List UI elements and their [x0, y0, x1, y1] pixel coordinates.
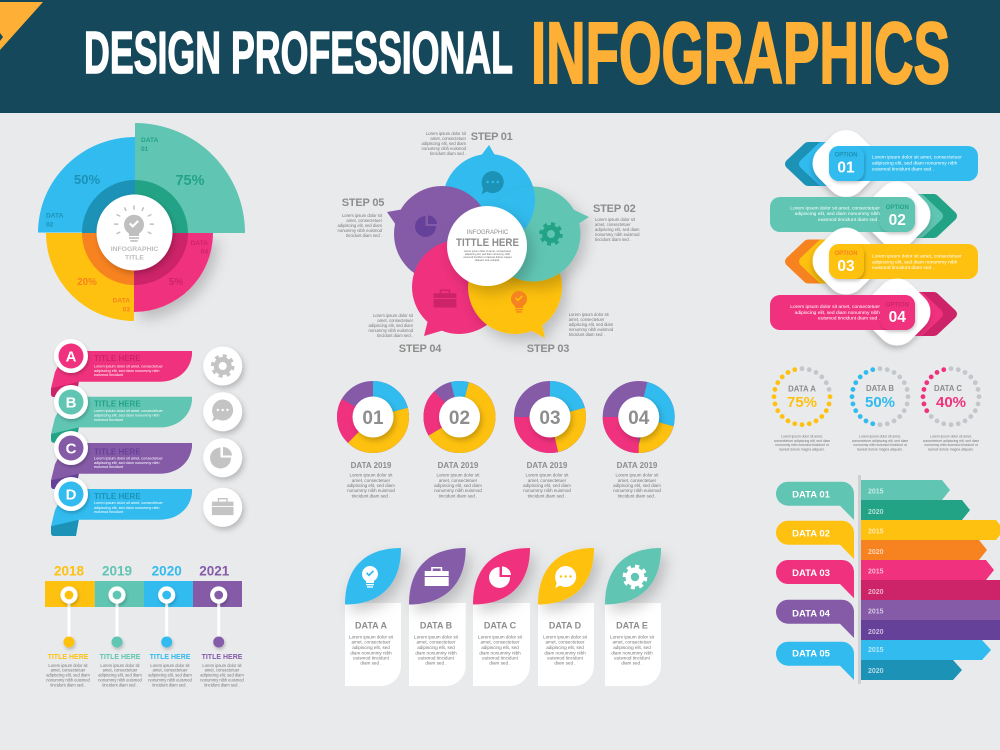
chart labels: 50% — [74, 172, 100, 187]
gauge B: consectetuer adipiscing elit, sed diam — [852, 439, 908, 443]
card E — [605, 548, 661, 686]
data label 04: DATA 04 — [792, 609, 831, 620]
gauge C: nonummy nibh euismod tincidunt ut — [924, 443, 978, 447]
card A: diam sed . — [360, 661, 382, 666]
chart labels: 75% — [175, 173, 205, 189]
card B: adipiscing elit, sed — [417, 645, 455, 650]
gauge C — [923, 369, 979, 452]
chart labels: DATA — [191, 240, 208, 247]
timeline 2021: TITLE HERE — [202, 654, 243, 661]
step labels: STEP 01 — [471, 131, 513, 143]
timeline 2019: TITLE HERE — [100, 654, 141, 661]
chart labels: 02 — [46, 222, 54, 228]
step descriptions: adipiscing elit, sed diam — [369, 323, 414, 328]
card A: Lorem ipsum dolor sit — [349, 634, 393, 639]
gauge A: nonummy nibh euismod tincidunt ut — [775, 443, 829, 447]
center circle — [447, 206, 527, 286]
ribbon B — [51, 385, 192, 443]
gauge C: laoreet dolore magna aliquam. — [928, 448, 974, 452]
option 01: OPTION — [834, 153, 858, 159]
card C: adipiscing elit, sed — [481, 645, 519, 650]
bar year labels: 2020 — [868, 589, 884, 596]
timeline 2020: amet, consectetuer — [153, 668, 188, 672]
icon: chat badge — [203, 392, 242, 431]
polar quadrant chart — [38, 123, 245, 321]
chart labels: 01 — [141, 146, 149, 153]
gauge A: Lorem ipsum dolor sit amet, — [781, 434, 823, 438]
option 04: OPTION — [886, 303, 909, 309]
timeline 2020: tincidunt diam sed . — [152, 682, 188, 687]
donut 04: DATA 2019 — [617, 461, 658, 470]
donut 03: Lorem ipsum dolor sit — [525, 472, 569, 478]
option 02: euismod tincidunt diam sed . — [818, 217, 880, 223]
timeline 2019 — [98, 564, 142, 687]
gauge B: Lorem ipsum dolor sit amet, — [859, 434, 901, 438]
card A — [345, 548, 401, 686]
donut 02: nonummy nibh euismod — [434, 488, 482, 493]
step descriptions: tincidunt diam sed . — [377, 333, 413, 338]
option 03: adipiscing elit, sed diam nonummy nibh — [872, 259, 958, 265]
circle: step 04 — [412, 240, 506, 336]
ribbon C: C — [66, 440, 77, 458]
gauge A: laoreet dolore magna aliquam. — [779, 448, 825, 452]
corner ribbon — [0, 2, 43, 50]
donut 02 — [432, 389, 488, 498]
timeline 2019: tincidunt diam sed . — [102, 682, 138, 687]
card D: diam sed . — [554, 661, 576, 666]
card A: euismod tincidunt — [353, 656, 390, 661]
timeline 2021 — [199, 564, 244, 687]
option 03: euismod tincidunt diam sed . — [872, 265, 934, 271]
donut 01 — [345, 389, 401, 498]
center circle: adipiscing elit, sed diam nonummy nibh — [465, 252, 511, 256]
option 01: 01 — [837, 160, 855, 176]
timeline — [45, 564, 244, 687]
donut 02: Lorem ipsum dolor sit — [436, 472, 480, 478]
timeline 2020 — [148, 564, 192, 687]
ribbon C: TITLE HERE — [94, 447, 141, 456]
ribbon B: TITLE HERE — [94, 399, 141, 408]
card C: DATA C — [484, 621, 517, 631]
ribbon D: TITLE HERE — [94, 492, 141, 501]
option 01: euismod tincidunt diam sed . — [872, 166, 934, 172]
ribbon B: euismod tincidunt — [94, 418, 124, 422]
timeline 2020: adipiscing elit, sed diam — [148, 672, 192, 678]
step descriptions: nonummy nibh euismod — [422, 146, 467, 151]
timeline 2020: TITLE HERE — [150, 654, 191, 661]
step descriptions: Lorem ipsum dolor sit — [595, 217, 635, 222]
step descriptions: adipiscing elit, sed diam — [422, 141, 467, 146]
card C: amet, consectetuer — [480, 640, 520, 645]
ribbon D: D — [66, 486, 77, 504]
data label 02 — [776, 521, 854, 559]
chart labels: 03 — [123, 306, 130, 314]
step descriptions: adipiscing elit, sed diam — [569, 322, 614, 327]
ribbon C: adipiscing elit, sed diam nonummy nibh — [94, 461, 159, 465]
donut 01: amet, consectetuer — [352, 478, 391, 483]
chart labels: 5% — [169, 277, 183, 288]
card B: amet, consectetuer — [416, 640, 456, 645]
option 02: adipiscing elit, sed diam nonummy nibh — [795, 211, 880, 217]
step descriptions: Lorem ipsum dolor sit — [569, 312, 609, 317]
card D: adipiscing elit, sed — [546, 645, 584, 650]
gauge C: DATA C — [934, 384, 962, 393]
icon: gear badge — [203, 346, 242, 386]
chart labels: 20% — [77, 277, 97, 288]
timeline 2019: amet, consectetuer — [103, 668, 138, 672]
option 04: Lorem ipsum dolor sit amet, consectetuer — [790, 305, 880, 310]
gauge C: consectetuer adipiscing elit, sed diam — [923, 439, 979, 443]
card C: euismod tincidunt — [482, 656, 519, 661]
gauge A — [774, 369, 830, 452]
icon: pie — [415, 215, 437, 237]
option 04: adipiscing elit, sed diam nonummy nibh — [795, 310, 880, 316]
donut 02: amet, consectetuer — [439, 478, 478, 483]
option 01 — [790, 122, 978, 205]
donut 03: nonummy nibh euismod — [523, 488, 571, 493]
step labels: STEP 02 — [593, 203, 636, 215]
gauge B: nonummy nibh euismod tincidunt ut — [853, 443, 907, 447]
step labels: STEP 04 — [399, 343, 442, 355]
timeline 2021: nonummy nibh euismod — [200, 678, 244, 682]
icon: bulb — [511, 291, 527, 313]
ribbon B: adipiscing elit, sed diam nonummy nibh — [94, 414, 159, 418]
option 04 — [770, 270, 952, 354]
timeline 2018: amet, consectetuer — [51, 668, 86, 672]
circle: step 03 — [468, 240, 562, 338]
option 02 — [770, 173, 952, 257]
gauge A: consectetuer adipiscing elit, sed diam — [774, 439, 830, 443]
option 03: Lorem ipsum dolor sit amet, consectetuer — [872, 255, 962, 260]
donut 04 — [611, 389, 667, 498]
option 03: 03 — [837, 258, 855, 275]
timeline 2021: 2021 — [199, 564, 230, 579]
donut 02: 02 — [449, 408, 470, 429]
donut 02: DATA 2019 — [438, 461, 479, 470]
step descriptions: tincidunt diam sed . — [346, 233, 382, 238]
circle: step 05 — [387, 186, 490, 282]
timeline 2018: TITLE HERE — [48, 654, 89, 661]
bar year labels: 2015 — [868, 568, 884, 576]
icon: chat bubble — [482, 171, 504, 194]
circle: step 02 — [486, 186, 589, 282]
donut row — [345, 389, 667, 498]
step descriptions: amet, consectetuer — [346, 218, 383, 223]
donut 01: adipiscing elit, sed diam — [347, 483, 395, 488]
card C: diam sed . — [489, 661, 511, 666]
icon: briefcase badge — [203, 488, 242, 527]
ribbon C: euismod tincidunt — [94, 465, 124, 469]
donut 03: amet, consectetuer — [528, 478, 567, 483]
donut 01: tincidunt diam sed . — [352, 494, 390, 498]
gauge B — [852, 369, 908, 452]
center circle: TITTLE HERE — [456, 237, 519, 249]
ribbon D: adipiscing elit, sed diam nonummy nibh — [94, 506, 159, 510]
card E: amet, consectetuer — [612, 640, 652, 645]
chart labels — [46, 137, 208, 314]
data label 05: DATA 05 — [792, 649, 831, 660]
card E: adipiscing elit, sed — [613, 645, 651, 650]
timeline 2018: adipiscing elit, sed diam — [46, 672, 90, 678]
ribbon C: Lorem ipsum dolor sit amet, consectetuer — [94, 456, 163, 460]
ribbon D — [51, 477, 192, 536]
card D — [538, 548, 594, 686]
donut 04: amet, consectetuer — [618, 478, 657, 483]
card E: euismod tincidunt — [614, 656, 651, 661]
ribbon A: TITLE HERE — [94, 354, 141, 363]
card E: diam sed . — [621, 661, 643, 666]
donut 03: 03 — [539, 408, 561, 429]
card B: diam sed . — [425, 661, 447, 666]
card D: euismod tincidunt — [547, 656, 584, 661]
ribbon A: Lorem ipsum dolor sit amet, consectetuer — [94, 364, 163, 368]
step descriptions: nonummy nibh euismod — [569, 327, 614, 332]
timeline 2021: Lorem ipsum dolor sit — [202, 663, 242, 668]
icon: pie badge — [203, 438, 242, 477]
step descriptions: amet, consectetuer — [430, 136, 467, 141]
option 02: 02 — [889, 212, 906, 229]
donut 03: tincidunt diam sed . — [528, 494, 566, 498]
chart labels: DATA — [113, 298, 130, 304]
arrow bar chart — [776, 475, 1000, 684]
donut 03 — [522, 389, 578, 498]
card E: diam nonummy nibh — [611, 651, 653, 656]
timeline 2019: Lorem ipsum dolor sit — [100, 663, 140, 668]
step descriptions: Lorem ipsum dolor sit — [373, 313, 413, 318]
bar year labels: 2015 — [868, 528, 884, 536]
chart center title: INFOGRAPHIC — [111, 246, 158, 253]
ribbon list — [51, 339, 192, 536]
gauge C: Lorem ipsum dolor sit amet, — [930, 434, 972, 438]
ribbon A — [51, 339, 192, 397]
bar year labels: 2020 — [868, 509, 884, 516]
icon: gear — [541, 224, 561, 244]
step descriptions: Lorem ipsum dolor sit — [342, 213, 382, 218]
card B: euismod tincidunt — [418, 656, 455, 661]
bar year labels: 2015 — [868, 608, 884, 616]
card C: Lorem ipsum dolor sit — [478, 634, 522, 639]
step descriptions: nonummy nibh euismod — [338, 228, 383, 233]
step descriptions: amet, consectetuer — [569, 317, 605, 322]
timeline 2018: tincidunt diam sed . — [50, 682, 86, 687]
donut 01: 01 — [362, 408, 384, 429]
timeline 2019: adipiscing elit, sed diam — [98, 672, 142, 678]
donut 02: adipiscing elit, sed diam — [434, 483, 482, 488]
card B — [409, 548, 466, 686]
gauge C: 40% — [936, 394, 966, 411]
option list — [770, 122, 978, 354]
leaf cards — [345, 548, 661, 686]
timeline 2019: nonummy nibh euismod — [98, 678, 142, 682]
step descriptions — [338, 131, 640, 338]
donut 02: tincidunt diam sed . — [439, 494, 477, 498]
step descriptions: Lorem ipsum dolor sit — [426, 131, 466, 136]
timeline 2021: adipiscing elit, sed diam — [200, 672, 244, 678]
timeline 2021: amet, consectetuer — [205, 668, 240, 672]
option 04: 04 — [889, 309, 906, 326]
bar year labels: 2015 — [868, 647, 884, 654]
card D: DATA D — [549, 621, 582, 631]
option 01: Lorem ipsum dolor sit amet, consectetuer — [872, 156, 962, 161]
card B: Lorem ipsum dolor sit — [414, 634, 458, 639]
step descriptions: tincidunt diam sed . — [430, 151, 466, 156]
timeline 2020: Lorem ipsum dolor sit — [150, 663, 190, 668]
card D: diam nonummy nibh — [544, 651, 586, 656]
data label 04 — [776, 600, 854, 638]
donut 01: nonummy nibh euismod — [347, 488, 395, 493]
donut 01: DATA 2019 — [351, 461, 392, 470]
step descriptions: adipiscing elit, sed diam — [595, 227, 640, 232]
icon: briefcase — [434, 290, 456, 308]
option 04: euismod tincidunt diam sed . — [818, 316, 880, 322]
ribbon D: Lorem ipsum dolor sit amet, consectetuer — [94, 501, 163, 505]
step descriptions: nonummy nibh euismod — [369, 328, 414, 333]
center circle: Lorem ipsum dolor sit amet, consectetuer — [464, 250, 511, 253]
ribbon A: A — [66, 348, 77, 366]
bar year labels: 2020 — [868, 549, 884, 556]
step labels: STEP 05 — [342, 197, 384, 209]
bar year labels: 2015 — [868, 488, 884, 496]
option 03 — [790, 219, 978, 303]
gauge B: laoreet dolore magna aliquam. — [857, 448, 903, 452]
center circle: euismod tincidunt ut laoreet dolore magna — [463, 255, 512, 259]
data label 01 — [776, 482, 854, 520]
timeline 2018 — [46, 564, 90, 687]
data label 05 — [776, 642, 854, 680]
data label 01: DATA 01 — [792, 490, 831, 501]
card E: DATA E — [616, 621, 648, 631]
dotted gauges — [774, 369, 979, 452]
step descriptions: tincidunt diam sed . — [569, 332, 605, 337]
card C: diam nonummy nibh — [479, 651, 521, 656]
ribbon D: euismod tincidunt — [94, 510, 124, 514]
donut 04: 04 — [628, 408, 650, 429]
card A: amet, consectetuer — [351, 640, 391, 645]
donut 03: DATA 2019 — [527, 461, 568, 470]
step descriptions: adipiscing elit, sed diam — [338, 223, 383, 228]
step descriptions: amet, consectetuer — [595, 222, 631, 227]
bar year labels: 2020 — [868, 668, 884, 675]
donut 04: adipiscing elit, sed diam — [613, 483, 661, 488]
ribbon B: B — [66, 394, 77, 412]
donut 04: tincidunt diam sed . — [618, 494, 656, 498]
card A: DATA A — [355, 621, 387, 631]
chart center title: TITLE — [125, 254, 144, 262]
step descriptions: amet, consectetuer — [377, 318, 414, 323]
icon: light bulb — [115, 206, 153, 242]
data label 02: DATA 02 — [792, 529, 830, 540]
data label 03: DATA 03 — [792, 568, 830, 579]
ribbon C — [51, 431, 192, 489]
ribbon B: Lorem ipsum dolor sit amet, consectetuer — [94, 409, 163, 413]
card C — [473, 548, 530, 686]
card D: amet, consectetuer — [545, 640, 585, 645]
center circle: aliquam erat volutpat. — [475, 258, 500, 262]
timeline 2021: tincidunt diam sed . — [204, 682, 240, 687]
center circle: INFOGRAPHIC — [467, 230, 509, 236]
header banner — [0, 0, 1000, 113]
card D: Lorem ipsum dolor sit — [543, 634, 587, 639]
card B: diam nonummy nibh — [415, 651, 457, 656]
donut 04: Lorem ipsum dolor sit — [615, 472, 659, 478]
gauge A: 75% — [787, 394, 817, 411]
step labels: STEP 03 — [527, 343, 569, 355]
step descriptions: nonummy nibh euismod — [595, 232, 640, 237]
card B: DATA B — [420, 621, 453, 631]
step labels — [342, 131, 636, 355]
step descriptions: tincidunt diam sed . — [595, 237, 631, 242]
timeline 2018: 2018 — [54, 564, 85, 579]
gauge B: DATA B — [866, 384, 894, 393]
ribbon A: adipiscing elit, sed diam nonummy nibh — [94, 369, 159, 373]
five step diagram — [338, 131, 640, 355]
gauge B: 50% — [865, 394, 895, 411]
card E: Lorem ipsum dolor sit — [610, 634, 654, 639]
bar year labels — [868, 488, 884, 675]
option 01: adipiscing elit, sed diam nonummy nibh — [872, 160, 958, 166]
timeline 2018: Lorem ipsum dolor sit — [48, 663, 88, 668]
chart labels: 04 — [201, 248, 208, 256]
timeline 2020: 2020 — [152, 564, 182, 579]
option 02: Lorem ipsum dolor sit amet, consectetuer — [790, 206, 880, 211]
card A: adipiscing elit, sed — [352, 645, 390, 650]
option 03: OPTION — [834, 251, 858, 257]
timeline 2020: nonummy nibh euismod — [148, 678, 192, 682]
gauge A: DATA A — [788, 385, 816, 394]
bar year labels: 2020 — [868, 629, 884, 636]
donut 01: Lorem ipsum dolor sit — [349, 472, 393, 478]
data label 03 — [776, 560, 854, 598]
timeline 2018: nonummy nibh euismod — [46, 678, 90, 682]
ribbon A: euismod tincidunt — [94, 373, 124, 377]
title: design professional: DESIGN PROFESSIONAL — [84, 20, 513, 86]
circle: step 01 — [443, 145, 535, 246]
donut 03: adipiscing elit, sed diam — [523, 483, 571, 488]
chart labels: DATA — [46, 212, 63, 220]
chart labels: DATA — [141, 137, 158, 144]
option 02: OPTION — [886, 205, 909, 211]
timeline 2019: 2019 — [102, 564, 132, 579]
donut 04: nonummy nibh euismod — [613, 488, 661, 493]
card A: diam nonummy nibh — [350, 651, 392, 656]
